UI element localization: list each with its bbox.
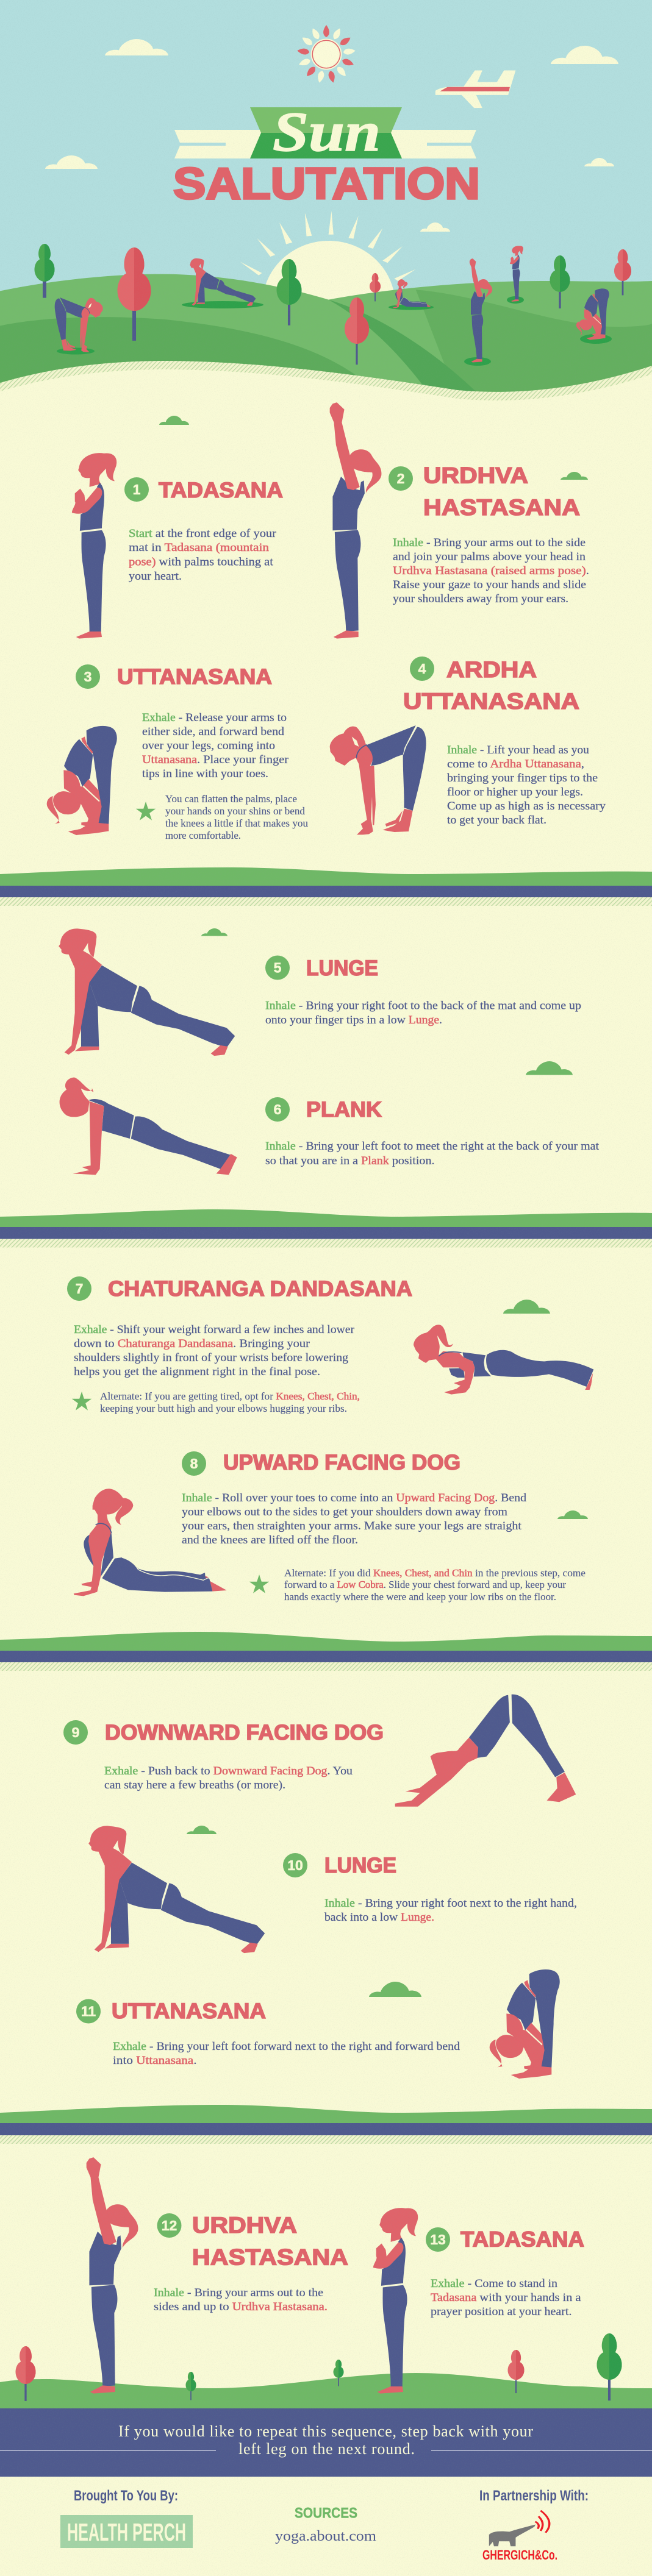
rising sun <box>262 241 395 369</box>
instructions: Exhale - Come to stand in <box>431 2277 558 2290</box>
instructions: Inhale - Roll over your toes to come into an Upward Facing Dog . Bend <box>182 1492 527 1504</box>
instructions: mat in Tadasana (mountain <box>129 541 270 554</box>
instructions: Exhale - Bring your left foot forward next to the right and forward bend <box>113 2040 460 2053</box>
title word: Salutation: SALUTATION <box>173 160 480 208</box>
instructions: Urdhva Hastasana (raised arms pose) . <box>393 564 589 577</box>
heading: URDHVA <box>423 463 528 488</box>
figure: urdhva hastasana <box>87 2157 138 2394</box>
hills <box>0 274 652 398</box>
instructions: into Uttanasana . <box>113 2054 196 2067</box>
instructions: your heart. <box>129 570 182 583</box>
badge 12: 12 <box>162 2218 177 2233</box>
instructions: Start at the front edge of your <box>129 527 277 540</box>
instructions <box>324 1897 577 1924</box>
tip: keeping your butt high and your elbows hugging your ribs. <box>100 1403 347 1414</box>
badge 7 <box>67 1276 91 1301</box>
heading: HASTASANA <box>423 495 580 520</box>
instructions: pose) with palms touching at <box>129 556 274 568</box>
instructions: Uttanasana . Place your finger <box>142 753 289 766</box>
sources <box>275 2505 376 2544</box>
heading: CHATURANGA DANDASANA <box>108 1277 412 1301</box>
badge 1 <box>124 477 149 502</box>
sky sun <box>297 25 356 84</box>
credit: in partnership with: In Partnership With: <box>479 2488 589 2504</box>
heading: TADASANA <box>159 479 283 502</box>
section divider 3 <box>0 1632 652 1671</box>
badge 13 <box>426 2227 450 2252</box>
instructions: floor or higher up your legs. <box>447 786 583 799</box>
badge 4: 4 <box>418 661 426 677</box>
green clouds <box>159 416 588 1997</box>
title word: Sun: Sun <box>273 101 381 163</box>
credit: brought to you by <box>60 2488 193 2548</box>
instructions: so that you are in a Plank position. <box>265 1155 434 1167</box>
instructions <box>104 1765 353 1791</box>
badge 8 <box>182 1451 206 1476</box>
badge 2: 2 <box>397 471 404 486</box>
heading <box>192 2213 348 2270</box>
instructions: onto your finger tips in a low Lunge. <box>265 1014 442 1026</box>
badge 4 <box>410 656 434 681</box>
heading: UTTANASANA <box>117 665 272 689</box>
tip: more comfortable. <box>165 830 241 841</box>
instructions: helps you get the alignment right in the final pose. <box>74 1365 320 1378</box>
instructions: Raise your gaze to your hands and slide <box>393 578 586 591</box>
step 5 <box>59 928 581 1056</box>
closing banner: If you would like to repeat this sequence, step back with your <box>118 2422 533 2440</box>
trees <box>34 244 631 365</box>
figure: ardha uttanasana <box>330 725 426 834</box>
heading <box>403 657 579 714</box>
instructions: Exhale - Push back to Downward Facing Dog . You <box>104 1765 353 1777</box>
figure: plank <box>60 1078 237 1175</box>
tip: the knees a little if that makes you <box>165 817 308 829</box>
instructions <box>74 1323 355 1378</box>
heading: URDHVA <box>192 2213 297 2238</box>
heading: TADASANA <box>460 2227 584 2252</box>
step 11 <box>76 1969 560 2079</box>
step 2 <box>330 402 589 639</box>
instructions: Inhale - Bring your arms out to the <box>154 2286 323 2299</box>
tip <box>165 793 308 841</box>
step 6 <box>60 1078 600 1175</box>
instructions <box>265 1140 600 1167</box>
step 3 <box>47 664 308 841</box>
health perch logo: HEALTH PERCH <box>67 2518 186 2546</box>
step 9 <box>63 1695 576 1807</box>
heading: ARDHA <box>446 657 537 682</box>
title banner <box>174 101 476 163</box>
instructions: Inhale - Bring your right foot to the back of the mat and come up <box>265 1000 581 1012</box>
instructions: Come up as high as is necessary <box>447 800 606 813</box>
step 7 <box>67 1276 593 1414</box>
credit: in partnership with <box>479 2488 589 2563</box>
instructions: Inhale - Lift your head as you <box>447 744 590 756</box>
step 8 <box>74 1451 586 1603</box>
section divider 2 <box>0 1209 652 1247</box>
badge 13: 13 <box>430 2232 446 2247</box>
figure: tadasana <box>373 2208 418 2394</box>
tip star <box>249 1574 269 1593</box>
step 13 <box>373 2208 584 2394</box>
instructions <box>447 744 606 827</box>
badge 10 <box>283 1853 307 1877</box>
badge 9 <box>63 1720 88 1745</box>
tip <box>284 1567 586 1603</box>
instructions <box>393 536 589 605</box>
health perch logo <box>60 2515 193 2548</box>
instructions: back into a low Lunge. <box>324 1911 434 1924</box>
heading: LUNGE <box>306 956 378 980</box>
badge 5: 5 <box>274 959 282 975</box>
instructions: Tadasana with your hands in a <box>431 2291 581 2304</box>
heading: LUNGE <box>324 1854 396 1877</box>
instructions: your shoulders away from your ears. <box>393 592 568 605</box>
instructions: to get your back flat. <box>447 814 546 827</box>
header scene <box>0 0 652 414</box>
closing banner: left leg on the next round. <box>238 2440 415 2458</box>
instructions: Exhale - Shift your weight forward a few inches and lower <box>74 1323 355 1336</box>
badge 8: 8 <box>190 1456 198 1471</box>
yoga mats <box>57 296 612 366</box>
figure: lunge <box>88 1826 265 1953</box>
ghergich logo <box>482 2511 557 2563</box>
badge 11 <box>76 1999 101 2024</box>
instructions: can stay here a few breaths (or more). <box>104 1779 285 1791</box>
badge 5 <box>265 956 290 980</box>
step 4 <box>330 656 606 834</box>
instructions: Exhale - Release your arms to <box>142 711 287 724</box>
figure: uttanasana <box>47 726 117 835</box>
step 1 <box>72 453 283 639</box>
instructions <box>265 1000 581 1026</box>
instructions <box>113 2040 460 2067</box>
step 12 <box>87 2157 348 2394</box>
instructions: your ears, then straighten your arms. Make sure your legs are straight <box>182 1520 522 1532</box>
tip <box>100 1390 360 1414</box>
instructions: and the knees are lifted off the floor. <box>182 1534 358 1546</box>
clouds <box>45 39 618 232</box>
sky <box>0 0 652 390</box>
badge 11: 11 <box>81 2003 96 2019</box>
section divider 1 <box>0 867 652 906</box>
credit: brought to you by: Brought To You By: <box>74 2488 178 2504</box>
figure: upward facing dog <box>74 1489 227 1596</box>
tip star <box>72 1392 91 1411</box>
badge 1: 1 <box>133 482 141 497</box>
instructions <box>142 711 289 780</box>
badge 3: 3 <box>84 669 91 685</box>
instructions: prayer position at your heart. <box>431 2305 572 2318</box>
instructions: and join your palms above your head in <box>393 550 586 563</box>
instructions: Inhale - Bring your arms out to the side <box>393 536 586 549</box>
instructions: Inhale - Bring your right foot next to the right hand, <box>324 1897 577 1910</box>
step 10 <box>88 1826 577 1953</box>
instructions <box>129 527 277 583</box>
heading: HASTASANA <box>192 2244 348 2270</box>
badge 2 <box>389 466 413 491</box>
tip: Alternate: If you are getting tired, opt for Knees, Chest, Chin, <box>100 1390 360 1402</box>
instructions: Inhale - Bring your left foot to meet the right at the back of your mat <box>265 1140 600 1153</box>
small figures <box>55 246 609 363</box>
instructions: over your legs, coming into <box>142 739 275 752</box>
figure: chaturanga <box>414 1325 593 1395</box>
closing banner <box>0 2408 652 2477</box>
figure: urdhva hastasana <box>330 402 381 639</box>
tip: your hands on your shins or bend <box>165 805 306 817</box>
figure: downward facing dog <box>395 1695 576 1807</box>
heading: PLANK <box>306 1098 382 1122</box>
bottom trees <box>16 2333 622 2401</box>
instructions <box>182 1492 527 1546</box>
instructions: bringing your finger tips to the <box>447 772 598 785</box>
instructions: either side, and forward bend <box>142 725 285 738</box>
cream wave with hatched edge <box>0 361 652 414</box>
heading: UPWARD FACING DOG <box>223 1451 460 1475</box>
badge 3 <box>76 664 100 689</box>
instructions <box>154 2286 328 2313</box>
instructions: come to Ardha Uttanasana , <box>447 758 584 770</box>
heading: DOWNWARD FACING DOG <box>105 1721 384 1745</box>
tip: Alternate: If you did Knees, Chest, and Chin in the previous step, come <box>284 1567 586 1579</box>
instructions: sides and up to Urdhva Hastasana. <box>154 2300 328 2313</box>
sources: yoga.about.com <box>275 2528 376 2544</box>
badge 6 <box>265 1097 290 1122</box>
tip: hands exactly where the were and keep your low ribs on the floor. <box>284 1591 556 1603</box>
sources: SOURCES <box>295 2505 357 2521</box>
rising sun rays <box>240 211 416 281</box>
instructions: tips in line with your toes. <box>142 767 268 780</box>
badge 9: 9 <box>72 1724 79 1740</box>
tip: You can flatten the palms, place <box>165 793 297 805</box>
bottom hill <box>0 2373 652 2409</box>
instructions: shoulders slightly in front of your wrists before lowering <box>74 1351 349 1364</box>
instructions: your elbows out to the sides to get your shoulders down away from <box>182 1506 507 1518</box>
figure: lunge <box>59 928 235 1056</box>
heading: UTTANASANA <box>403 689 579 714</box>
badge 6: 6 <box>274 1101 281 1117</box>
badge 12 <box>157 2213 182 2238</box>
ghergich logo: GHERGICH&Co. <box>482 2547 557 2563</box>
heading: UTTANASANA <box>112 1999 266 2023</box>
tip: forward to a Low Cobra. Slide your chest forward and up, keep your <box>284 1579 567 1590</box>
section divider 4 <box>0 2105 652 2144</box>
badge 10: 10 <box>287 1857 303 1873</box>
airplane <box>435 70 515 108</box>
heading <box>423 463 580 520</box>
figure: uttanasana <box>490 1969 560 2079</box>
tip star <box>136 802 156 820</box>
badge 7: 7 <box>76 1281 83 1297</box>
figure: tadasana <box>72 453 116 639</box>
instructions: down to Chaturanga Dandasana . Bringing your <box>74 1337 310 1350</box>
instructions <box>431 2277 581 2318</box>
